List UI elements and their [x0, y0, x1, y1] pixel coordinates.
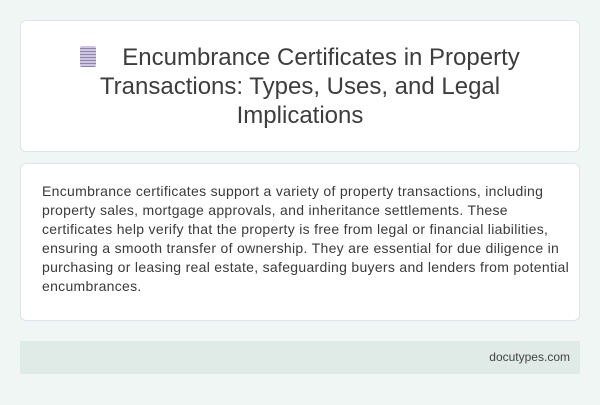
text block: description — [42, 183, 569, 294]
text block: description: ensuring a smooth transfer of ownership. They are essential for due diligence in — [42, 240, 559, 256]
panel: title card — [20, 20, 580, 152]
icon: document — [80, 46, 96, 67]
title: Implications — [237, 102, 363, 129]
text block: description: certificates help verify that the property is free from legal or financial liabilities, — [42, 221, 548, 237]
footer: source: docutypes.com — [489, 350, 570, 364]
text block: description: Encumbrance certificates support a variety of property transactions, including — [42, 183, 543, 199]
text block: description: property sales, mortgage approvals, and inheritance settlements. These — [42, 202, 508, 218]
text block: description: encumbrances. — [42, 278, 142, 294]
title — [80, 44, 520, 129]
text block: description: purchasing or leasing real estate, safeguarding buyers and lenders from potential — [42, 259, 569, 275]
title: Transactions: Types, Uses, and Legal — [100, 73, 500, 100]
title: Encumbrance Certificates in Property — [122, 44, 520, 71]
panel: description — [20, 163, 580, 321]
footer: source — [20, 341, 580, 374]
